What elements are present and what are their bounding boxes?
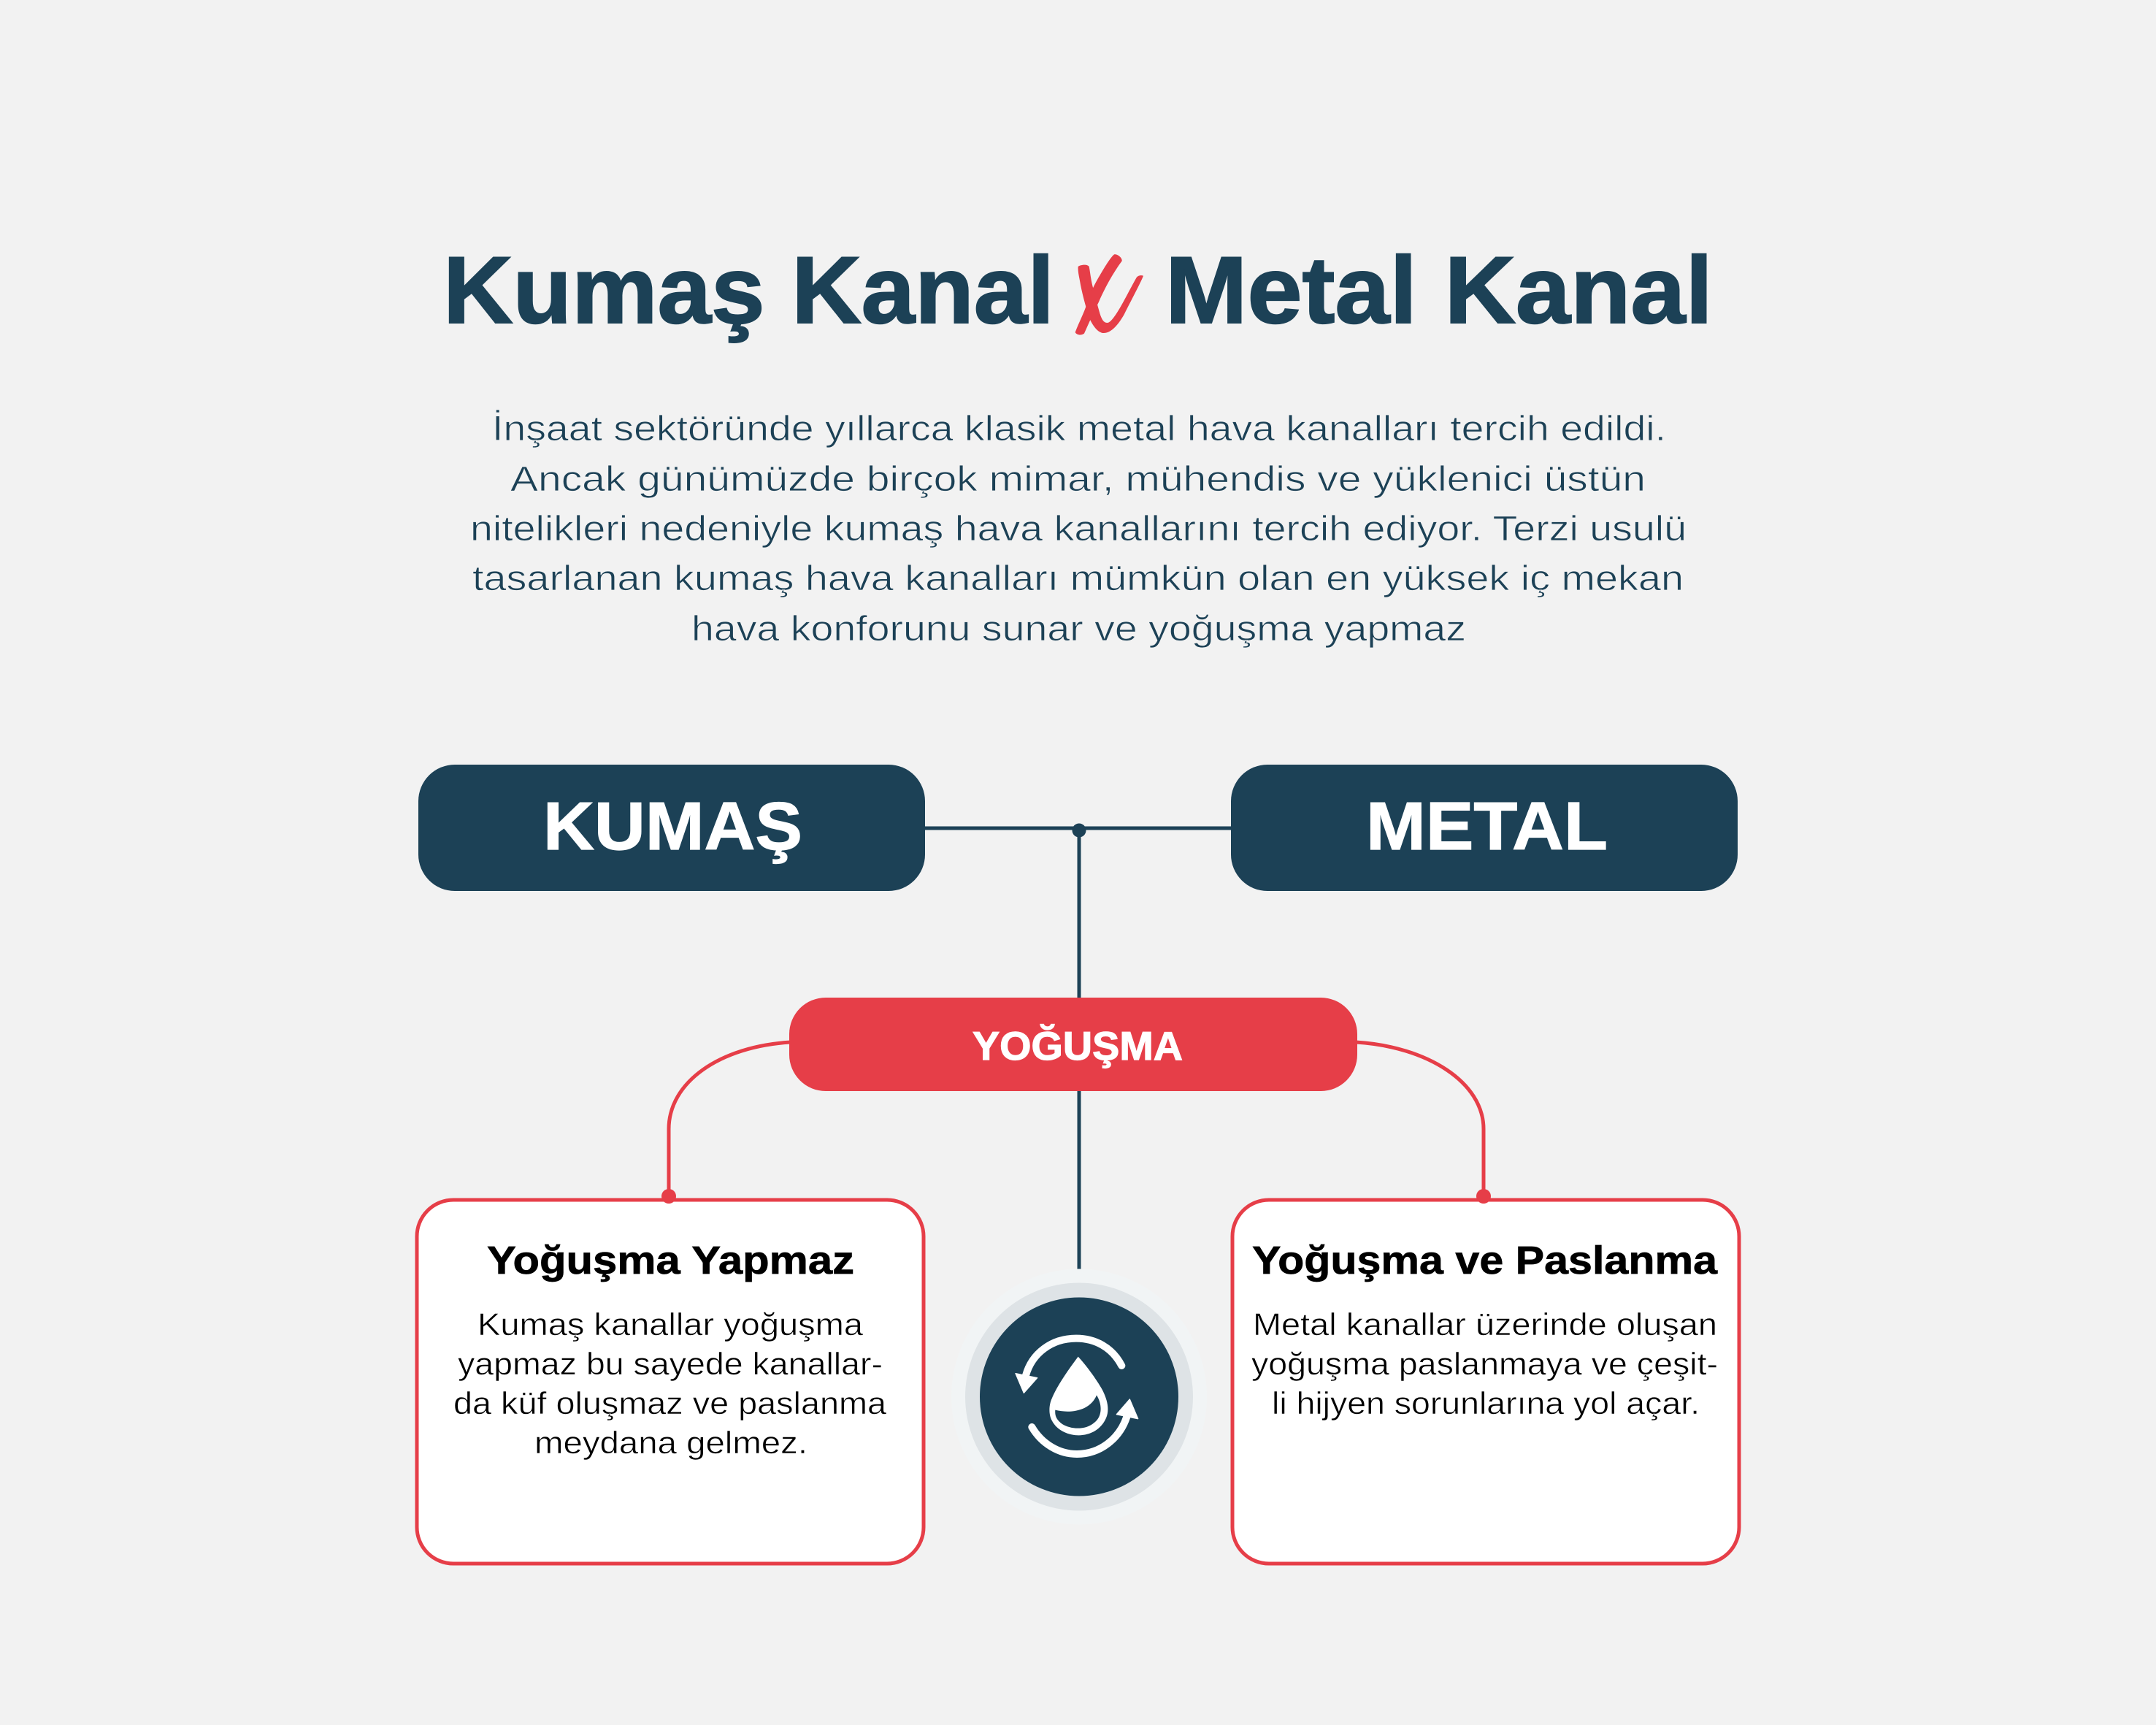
title xyxy=(443,237,1713,343)
panel heading: Yoğuşma Yapmaz: Yoğuşma Yapmaz xyxy=(487,1239,854,1282)
title: Kumaş Kanal xyxy=(443,237,1054,343)
icon: red x mark xyxy=(1075,254,1143,334)
panel body: kumaş: meydana gelmez. xyxy=(534,1426,807,1461)
panel body: metal: yoğuşma paslanmaya ve çeşit- xyxy=(1251,1347,1718,1382)
panel body: metal: li hijyen sorunlarına yol açar. xyxy=(1272,1386,1700,1421)
panel body: kumaş: Kumaş kanallar yoğuşma xyxy=(477,1307,863,1342)
heading pill: METAL: METAL xyxy=(1366,788,1608,864)
intro paragraph: hava konforunu sunar ve yoğuşma yapmaz xyxy=(691,610,1466,649)
title: Metal Kanal xyxy=(1165,237,1713,343)
connector: left curve xyxy=(669,1042,791,1191)
intro paragraph: Ancak günümüzde birçok mimar, mühendis ve yüklenici üstün xyxy=(510,460,1646,499)
intro paragraph: İnşaat sektöründe yıllarca klasik metal hava kanalları tercih edildi. xyxy=(492,410,1666,448)
intro paragraph xyxy=(470,410,1687,649)
panel body: metal: Metal kanallar üzerinde oluşan xyxy=(1253,1307,1717,1342)
connector dot: right xyxy=(1476,1189,1491,1204)
category pill: YOĞUŞMA xyxy=(789,998,1357,1091)
heading pill: KUMAŞ xyxy=(418,765,925,891)
panel heading: Yoğuşma ve Paslanma: Yoğuşma ve Paslanma xyxy=(1252,1239,1718,1282)
panel: Yoğuşma Yapmaz xyxy=(417,1189,924,1564)
intro paragraph: nitelikleri nedeniyle kumaş hava kanallarını tercih ediyor. Terzi usulü xyxy=(470,510,1687,548)
connector dot: left xyxy=(661,1189,676,1204)
connector: header and centre lines xyxy=(925,824,1231,1269)
panel body: kumaş xyxy=(453,1307,886,1461)
panel body: metal xyxy=(1251,1307,1718,1421)
panel body: kumaş: yapmaz bu sayede kanallar- xyxy=(458,1347,883,1382)
panel body: kumaş: da küf oluşmaz ve paslanma xyxy=(453,1386,886,1421)
panel: Yoğuşma ve Paslanma xyxy=(1232,1189,1739,1564)
heading pill: KUMAŞ: KUMAŞ xyxy=(543,788,802,864)
heading pill: METAL xyxy=(1231,765,1738,891)
category pill: YOĞUŞMA: YOĞUŞMA xyxy=(972,1023,1183,1068)
connector: right curve xyxy=(1356,1042,1484,1191)
intro paragraph: tasarlanan kumaş hava kanalları mümkün olan en yüksek iç mekan xyxy=(472,559,1684,598)
icon: water drop with cycle arrows xyxy=(951,1269,1207,1525)
